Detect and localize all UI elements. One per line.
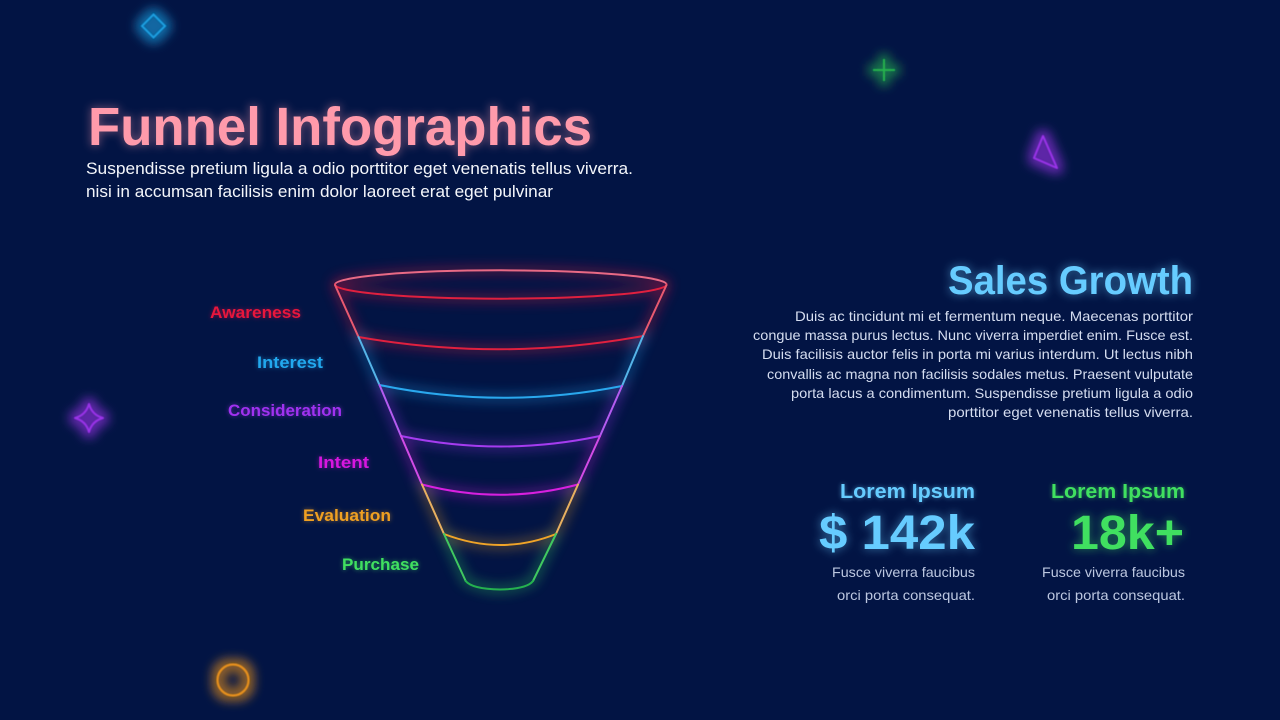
stat caption: Fusce viverra faucibus [832,564,975,580]
stat label: Lorem Ipsum [840,481,975,503]
stat: 18k+ [1042,481,1185,603]
funnel segment: Purchase [444,534,556,590]
sales growth paragraph: Duis ac tincidunt mi et fermentum neque. Maecenas porttitor [795,308,1193,324]
icon: green plus [873,59,895,81]
icon: purple triangle [1034,136,1057,168]
sales growth paragraph: Duis facilisis auctor felis in porta mi varius interdum. Ut lectus nibh [762,346,1193,362]
stat caption: orci porta consequat. [1047,587,1185,603]
funnel segment: Interest [358,336,643,398]
funnel chart [335,270,666,590]
label: Intent: Intent [318,453,369,472]
sales growth paragraph [753,308,1193,420]
icon: purple four-point star [75,404,103,432]
label: Purchase: Purchase [342,555,419,574]
funnel glow [335,270,666,590]
icon: blue diamond [142,14,165,38]
stat value: 18k+ [1071,507,1184,560]
subtitle text [86,159,633,201]
sales growth paragraph: porttitor eget venenatis tellus viverra. [948,404,1193,420]
stat label: Lorem Ipsum [1051,481,1185,503]
funnel labels [210,303,419,574]
sales growth paragraph: congue massa purus lectus. Nunc viverra imperdiet enim. Fusce est. [753,327,1193,343]
icon: orange ring [218,664,248,696]
subtitle text: Suspendisse pretium ligula a odio porttitor eget venenatis tellus viverra. [86,159,633,178]
funnel segment: Intent [401,436,600,495]
label: Interest: Interest [257,353,323,372]
stat caption [1042,564,1185,603]
sales growth paragraph: porta lacus a condimentum. Suspendisse pretium ligula a odio [791,385,1193,401]
funnel segment: Consideration [380,385,622,446]
label: Consideration: Consideration [228,401,342,420]
stat caption: orci porta consequat. [837,587,975,603]
funnel segment: Evaluation [422,484,578,545]
stat caption [832,564,975,603]
funnel segment: Awareness [335,270,666,349]
stat caption: Fusce viverra faucibus [1042,564,1185,580]
label: Evaluation: Evaluation [303,506,391,525]
sales growth paragraph: convallis ac magna non facilisis sodales metus. Praesent vulputate [767,366,1193,382]
subtitle text: nisi in accumsan facilisis enim dolor laoreet erat eget pulvinar [86,182,553,201]
heading: Sales Growth: Sales Growth [948,259,1193,303]
stat: $ 142k [819,481,975,603]
stat value: $ 142k [819,507,975,560]
title: Funnel Infographics [88,97,592,157]
label: Awareness: Awareness [210,303,301,322]
